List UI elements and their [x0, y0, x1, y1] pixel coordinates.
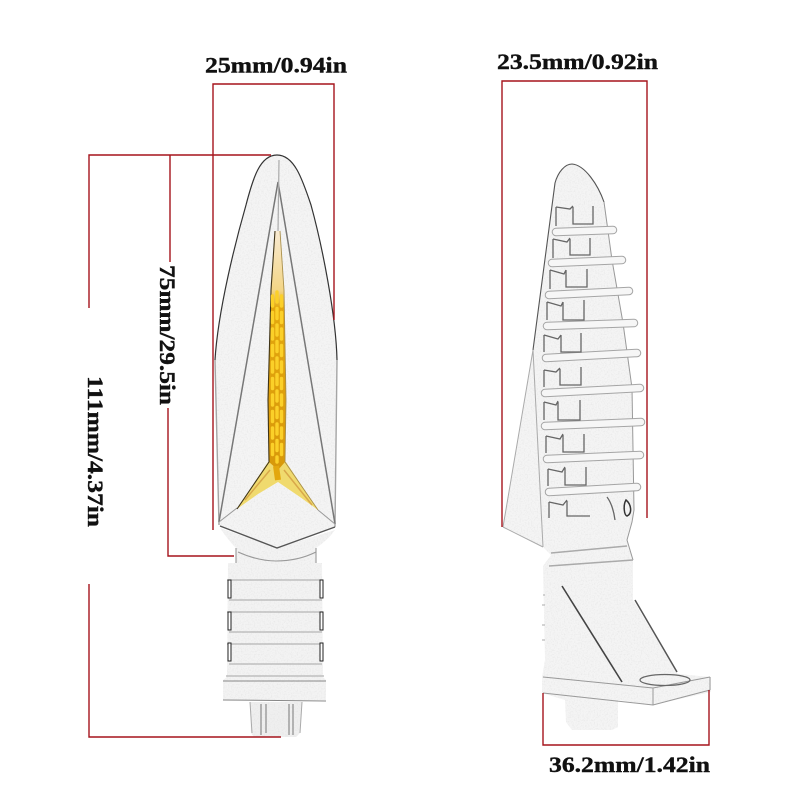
label: 75mm height: 75mm/29.5in [155, 265, 180, 406]
threaded base [223, 563, 326, 701]
width bracket: left lamp [213, 84, 334, 530]
right lamp: side view [503, 164, 711, 730]
connector pin [250, 702, 302, 737]
amber LED strip [237, 231, 318, 510]
mounting base and foot [542, 546, 710, 705]
fin windows [544, 206, 631, 520]
label: 23.5mm width: 23.5mm/0.92in [497, 49, 659, 74]
cooling fins [545, 230, 641, 492]
foot width bracket [543, 690, 709, 745]
total height bracket [89, 155, 281, 737]
lens height bracket [168, 155, 234, 556]
left lamp: front view [215, 155, 337, 737]
label: 111mm height: 111mm/4.37in [83, 376, 108, 528]
width bracket: right lamp [502, 81, 647, 527]
lamp lens body [215, 155, 337, 548]
label: 36.2mm width: 36.2mm/1.42in [549, 752, 711, 777]
label: 25mm width: 25mm/0.94in [205, 52, 348, 78]
dimension lines [89, 81, 709, 745]
side body silhouette [503, 164, 711, 730]
neck [220, 528, 335, 564]
